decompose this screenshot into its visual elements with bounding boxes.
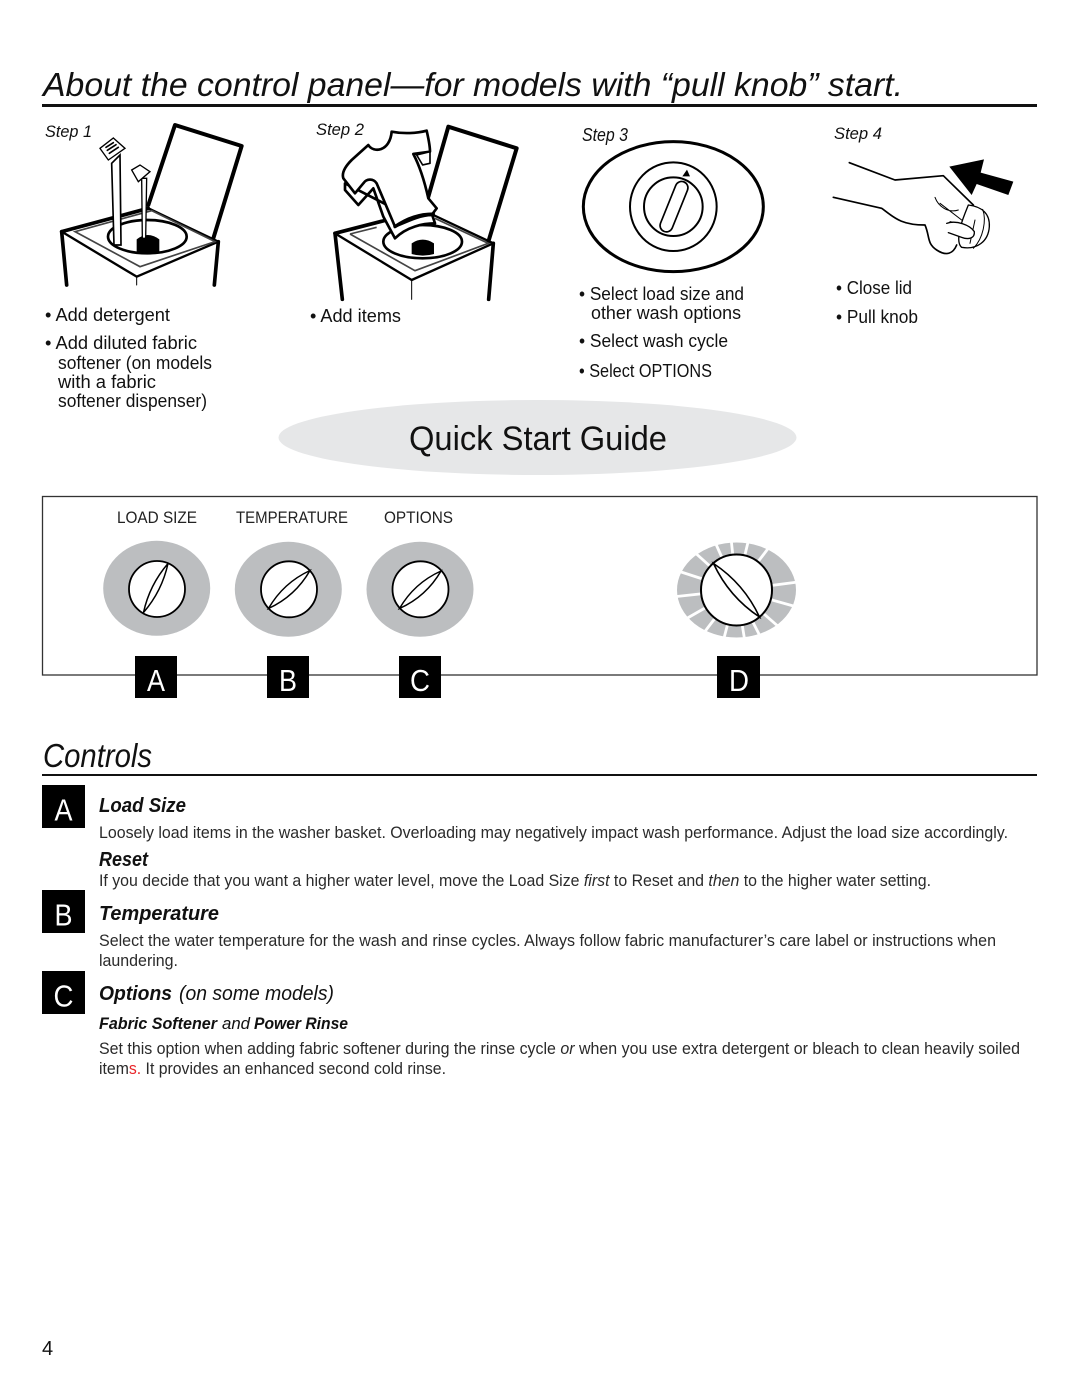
step 1 instructions: with a fabric <box>57 372 156 392</box>
section C: options <box>42 971 1020 1078</box>
marker B: B <box>54 898 72 932</box>
step 1 instructions <box>45 305 212 411</box>
label: temperature: TEMPERATURE <box>236 509 348 527</box>
step 4 label: Step 4 <box>834 124 882 143</box>
marker B <box>42 890 85 933</box>
step 3 instructions: • Select OPTIONS <box>579 361 712 381</box>
options text: Set this option when adding fabric softener during the rinse cycle or when you use extra detergent or bleach to clean heavily soiled <box>99 1039 1020 1058</box>
banner: quick start guide: Quick Start Guide <box>409 420 667 458</box>
fabric softener subheading: Power Rinse <box>254 1015 348 1033</box>
section A: load size <box>42 785 1008 890</box>
step 3 instructions <box>579 284 744 381</box>
temperature text: Select the water temperature for the wash and rinse cycles. Always follow fabric manufacturer’s care label or instructions when <box>99 931 996 950</box>
reset text: If you decide that you want a higher water level, move the Load Size first to Reset and then to the higher water setting. <box>99 871 931 890</box>
banner: quick start guide <box>278 400 796 475</box>
step 1 instructions: • Add detergent <box>45 305 170 325</box>
title: About the control panel—for models with “pull knob” start. <box>41 66 903 103</box>
section B: temperature <box>42 890 996 970</box>
step 1 instructions: softener dispenser) <box>58 391 207 411</box>
step 4 instructions <box>836 278 918 327</box>
knob D: cycle dial <box>672 538 798 642</box>
temperature heading: Temperature <box>99 903 219 925</box>
step 1 instructions: softener (on models <box>58 353 212 373</box>
panel: step 3 <box>579 125 763 381</box>
reset heading: Reset <box>99 849 149 871</box>
temperature text <box>99 931 996 970</box>
options text: items. It provides an enhanced second cold rinse. <box>99 1059 446 1078</box>
step 3 label: Step 3 <box>582 125 628 145</box>
callout tag A <box>135 656 177 698</box>
knob A <box>103 541 210 636</box>
callout tag C: C <box>410 663 430 698</box>
label: options: OPTIONS <box>384 509 453 527</box>
marker A: A <box>54 792 73 828</box>
step 3 instructions: other wash options <box>591 303 741 323</box>
page number: 4 <box>42 1338 53 1360</box>
options heading <box>99 983 334 1005</box>
panel: step 1 <box>45 122 242 411</box>
knob C <box>366 542 474 637</box>
marker C <box>42 971 85 1014</box>
step 3 instructions: • Select load size and <box>579 284 744 304</box>
fabric softener subheading: and <box>222 1015 251 1033</box>
icon: washer with shirt <box>335 127 517 299</box>
panel: step 2 <box>310 120 517 326</box>
knob B <box>235 542 342 637</box>
options heading: Options <box>99 983 172 1005</box>
marker A <box>42 785 85 828</box>
label: load size: LOAD SIZE <box>117 509 197 527</box>
callout tag B: B <box>279 663 297 698</box>
step 2 label: Step 2 <box>316 120 365 139</box>
step 4 instructions: • Close lid <box>836 278 912 298</box>
marker C: C <box>54 978 74 1014</box>
fabric softener subheading <box>99 1015 348 1033</box>
step 3 instructions: • Select wash cycle <box>579 331 728 351</box>
callout tag B <box>267 656 309 698</box>
load size text: Loosely load items in the washer basket. Overloading may negatively impact wash performance. Adjust the load size accordingly. <box>99 823 1008 842</box>
icon: washer with detergent <box>62 125 242 285</box>
panel: control panel diagram <box>42 496 1037 675</box>
temperature text: laundering. <box>99 951 178 970</box>
heading: controls: Controls <box>43 737 152 774</box>
fabric softener subheading: Fabric Softener <box>99 1015 219 1033</box>
icon: hand pulling knob <box>833 159 1013 254</box>
options heading: (on some models) <box>179 983 334 1005</box>
load size heading: Load Size <box>99 795 186 817</box>
panel: step 4 <box>833 124 1013 327</box>
callout tag C <box>399 656 441 698</box>
step 1 label: Step 1 <box>45 122 92 141</box>
options text <box>99 1039 1020 1078</box>
step 1 instructions: • Add diluted fabric <box>45 333 197 353</box>
step 4 instructions: • Pull knob <box>836 307 918 327</box>
callout tag D <box>717 656 760 698</box>
step 2 instructions: • Add items <box>310 306 401 326</box>
callout tag A: A <box>147 663 165 698</box>
icon: cycle dial <box>583 142 763 272</box>
callout tag D: D <box>729 663 749 698</box>
